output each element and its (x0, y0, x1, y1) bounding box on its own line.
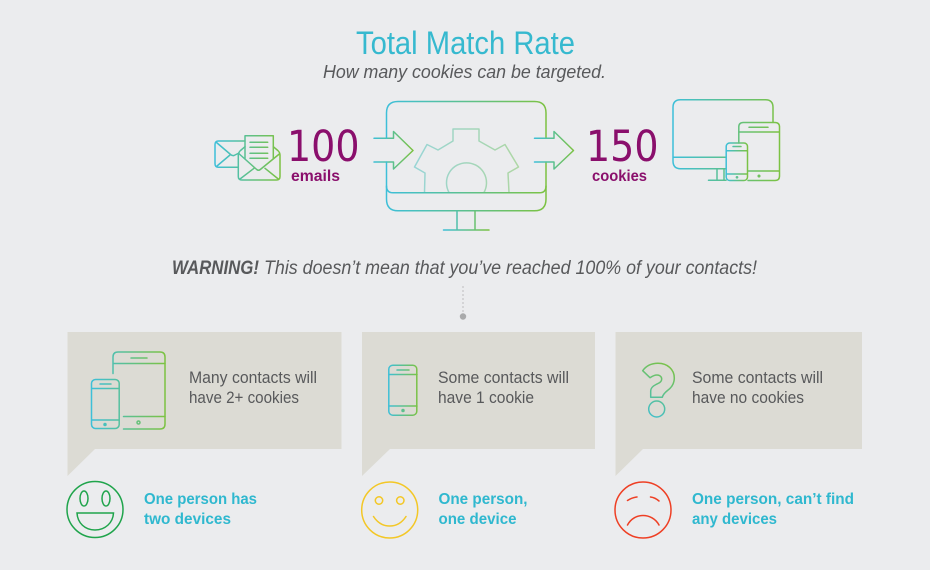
icon: monitor with gear (386, 102, 546, 230)
icon: arrow in (374, 132, 413, 169)
caption: no devices: One person, can’t find (692, 491, 854, 508)
panel text: Many contacts will (189, 369, 317, 387)
monitor stand (444, 211, 489, 230)
panel text: Some contacts will (438, 369, 569, 387)
icon: phone (389, 365, 417, 415)
gear (414, 129, 518, 192)
caption: two devices (144, 491, 257, 528)
caption: no devices (692, 491, 854, 528)
number: 150 cookies: cookies (592, 168, 647, 185)
number: 100 emails: emails (291, 168, 340, 185)
panel: many contacts (68, 332, 342, 476)
icon: arrow out (534, 132, 574, 169)
panel text (692, 369, 823, 407)
icon: tablet and phone (92, 352, 165, 429)
warning text: This doesn’t mean that you’ve reached 100% of your contacts! (264, 257, 758, 279)
panel text (189, 369, 317, 407)
warning text: WARNING! (172, 257, 259, 279)
panel: some contacts, no cookies (616, 332, 862, 476)
icon: question mark (643, 363, 674, 417)
caption: one device: one device (438, 511, 517, 528)
caption: two devices: One person has (144, 491, 257, 508)
panel text: Some contacts will (692, 369, 823, 387)
icon: smile face (362, 482, 418, 538)
dotted connector (460, 286, 466, 320)
caption: one device: One person, (438, 491, 528, 508)
title: Total Match Rate (356, 25, 575, 61)
speech bubble (362, 332, 595, 476)
panel text: have 2+ cookies (189, 389, 299, 407)
monitor frame (386, 102, 546, 211)
speech bubble (616, 332, 862, 476)
icon: big smile face (67, 482, 123, 538)
caption: two devices: two devices (144, 511, 231, 528)
number: 150 cookies: 150 (586, 122, 659, 172)
caption: one device (438, 491, 528, 528)
panel text: have no cookies (692, 389, 804, 407)
caption: no devices: any devices (692, 511, 777, 528)
icon: envelopes and letter (215, 136, 280, 180)
number: 100 emails: 100 (287, 122, 360, 172)
panel text (438, 369, 569, 407)
speech bubble (68, 332, 342, 476)
panel: some contacts, one cookie (362, 332, 595, 476)
icon: sad face (615, 482, 671, 538)
panel text: have 1 cookie (438, 389, 534, 407)
icon: monitor, tablet and phone (673, 100, 780, 180)
subtitle: How many cookies can be targeted. (323, 61, 606, 82)
